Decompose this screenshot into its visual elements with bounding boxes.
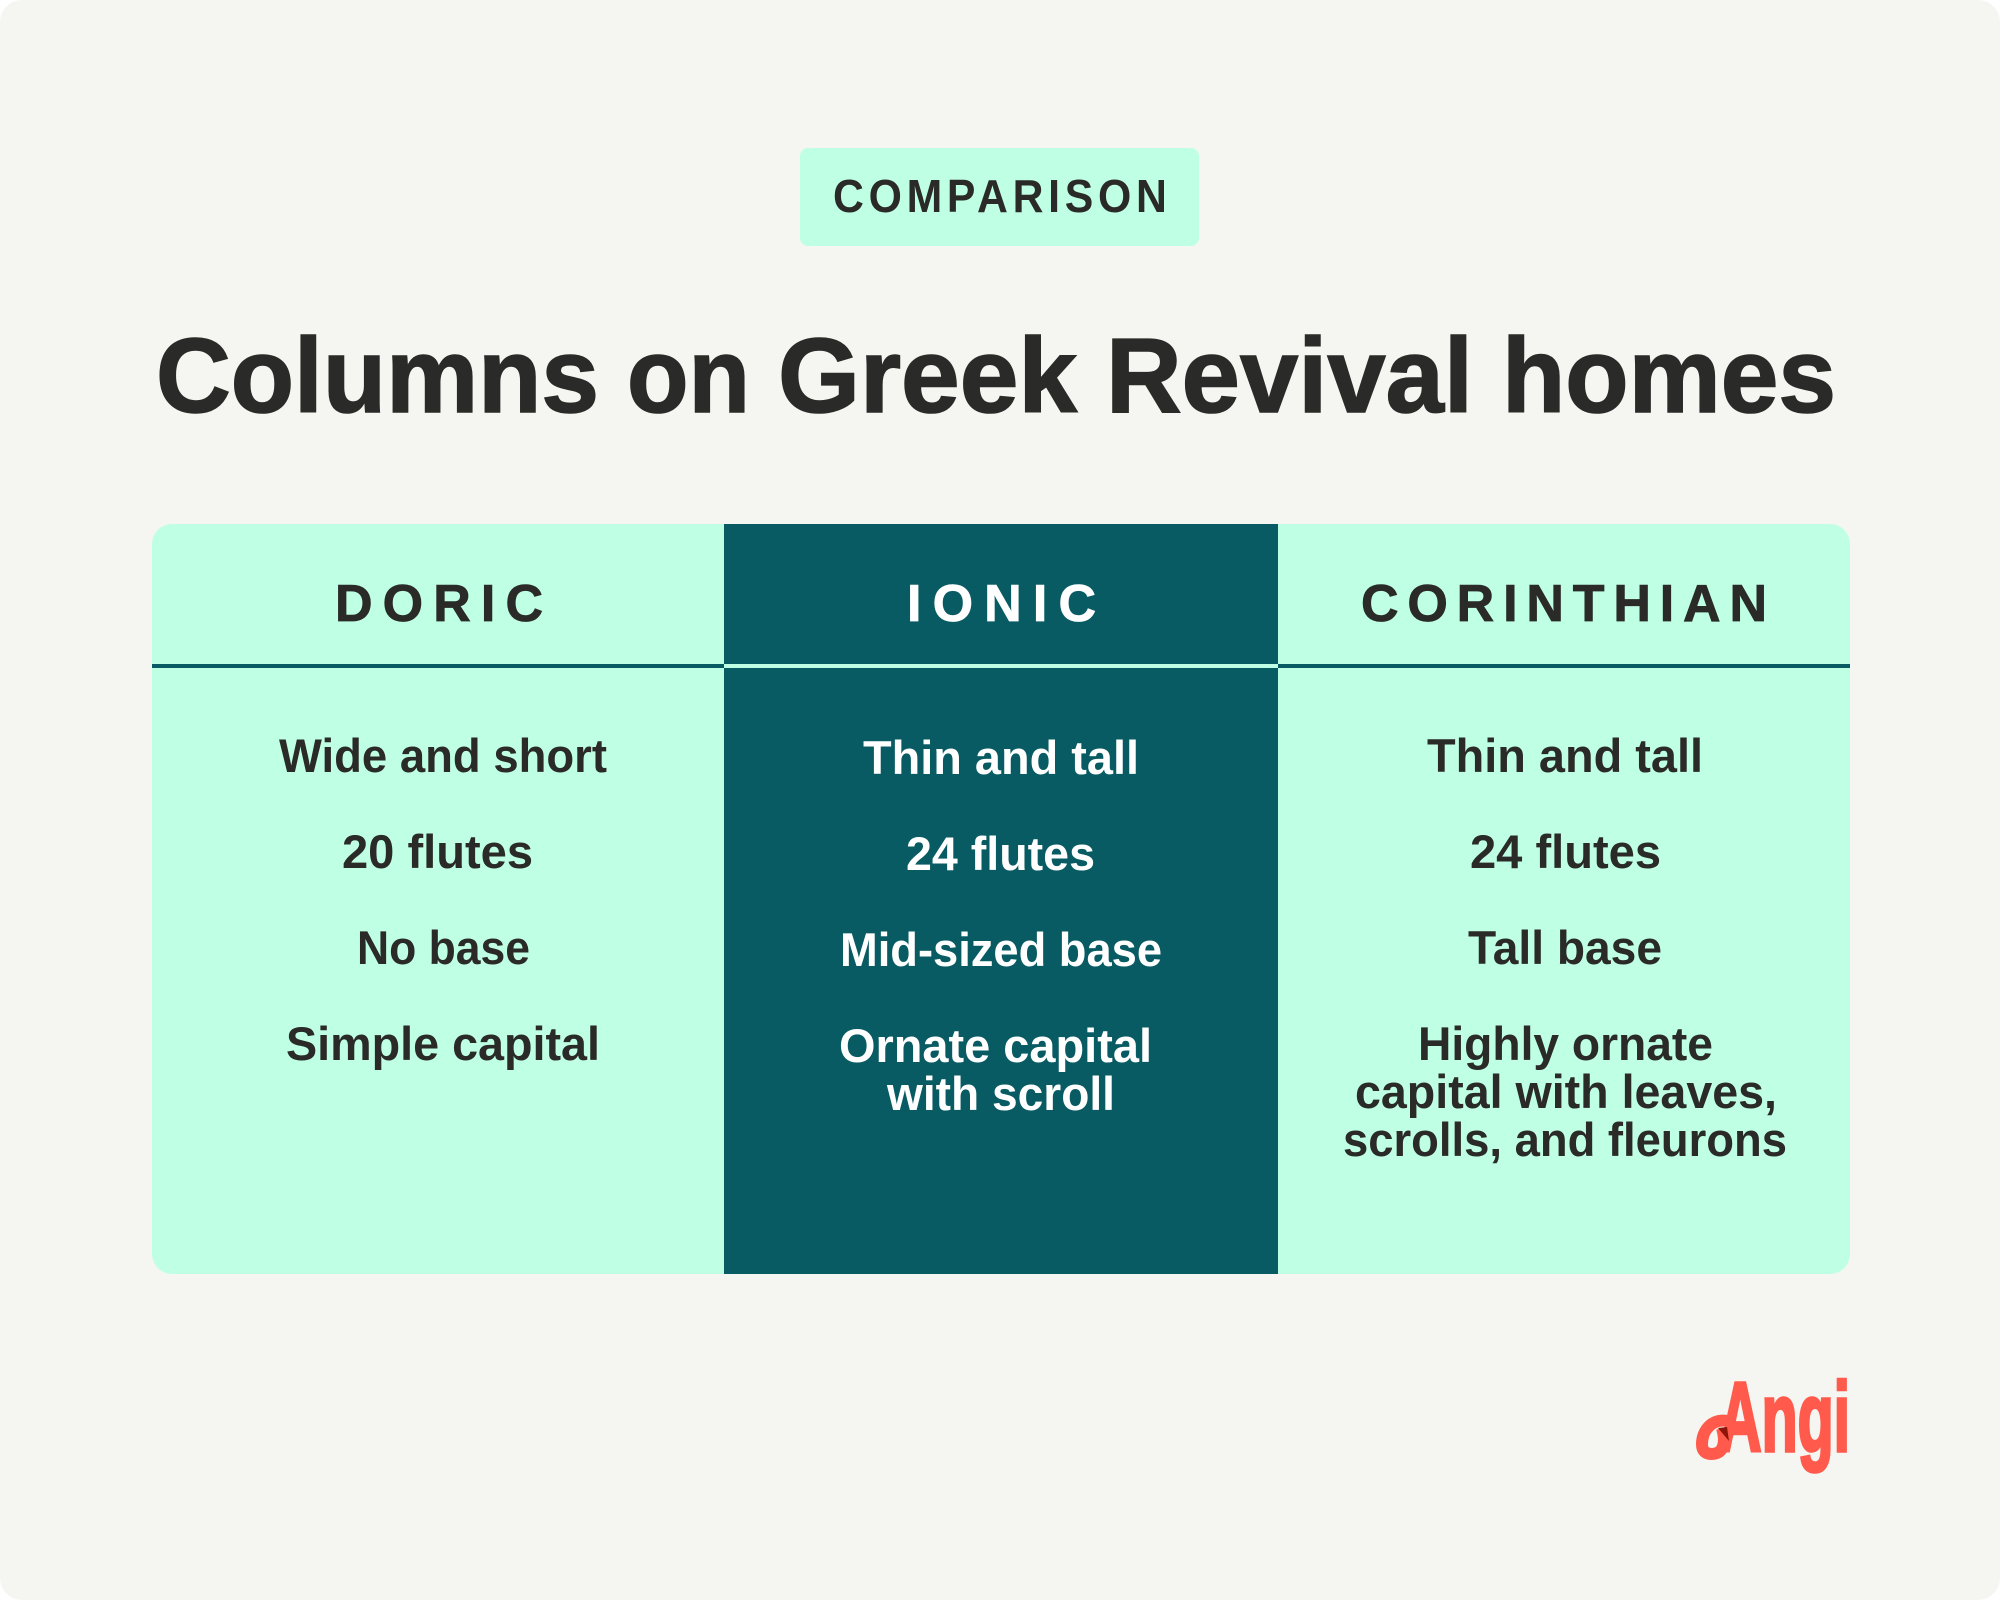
corinthian traits: Thin and tall bbox=[1427, 729, 1703, 782]
doric traits: Simple capital bbox=[286, 1017, 600, 1070]
heading: corinthian: CORINTHIAN bbox=[1361, 575, 1767, 633]
ionic traits: Thin and tall bbox=[863, 731, 1139, 784]
ionic traits: Ornate capital bbox=[839, 1019, 1152, 1072]
heading: doric: DORIC bbox=[335, 575, 543, 633]
corinthian traits: scrolls, and fleurons bbox=[1343, 1113, 1787, 1166]
ionic traits: 24 flutes bbox=[906, 827, 1095, 880]
ionic traits bbox=[839, 731, 1162, 1120]
panel: corinthian column bbox=[1278, 524, 1850, 1274]
ionic traits: Mid-sized base bbox=[840, 923, 1162, 976]
logo: Angi bbox=[1702, 1362, 1850, 1472]
corinthian traits: Highly ornate bbox=[1418, 1017, 1713, 1070]
logo: Angi: Angi bbox=[1719, 1362, 1850, 1472]
title: Greek bbox=[778, 317, 1078, 435]
title: Columns bbox=[156, 317, 599, 435]
tag: comparison: COMPARISON bbox=[833, 172, 1167, 222]
panel: ionic column bbox=[724, 524, 1278, 1274]
corinthian traits: capital with leaves, bbox=[1355, 1065, 1777, 1118]
ionic traits: with scroll bbox=[886, 1067, 1115, 1120]
corinthian traits: Tall base bbox=[1468, 921, 1662, 974]
doric traits: 20 flutes bbox=[342, 825, 533, 878]
comparison table bbox=[152, 524, 1850, 1274]
title: homes bbox=[1502, 317, 1836, 435]
doric traits bbox=[279, 729, 607, 1070]
doric traits: Wide and short bbox=[279, 729, 607, 782]
corinthian traits: 24 flutes bbox=[1470, 825, 1661, 878]
doric traits: No base bbox=[357, 921, 530, 974]
corinthian traits bbox=[1343, 729, 1787, 1166]
title: on bbox=[627, 317, 750, 435]
panel: doric column bbox=[152, 524, 724, 1274]
heading: ionic: IONIC bbox=[907, 575, 1096, 633]
tag: comparison bbox=[800, 148, 1199, 246]
title: Revival bbox=[1106, 317, 1473, 435]
